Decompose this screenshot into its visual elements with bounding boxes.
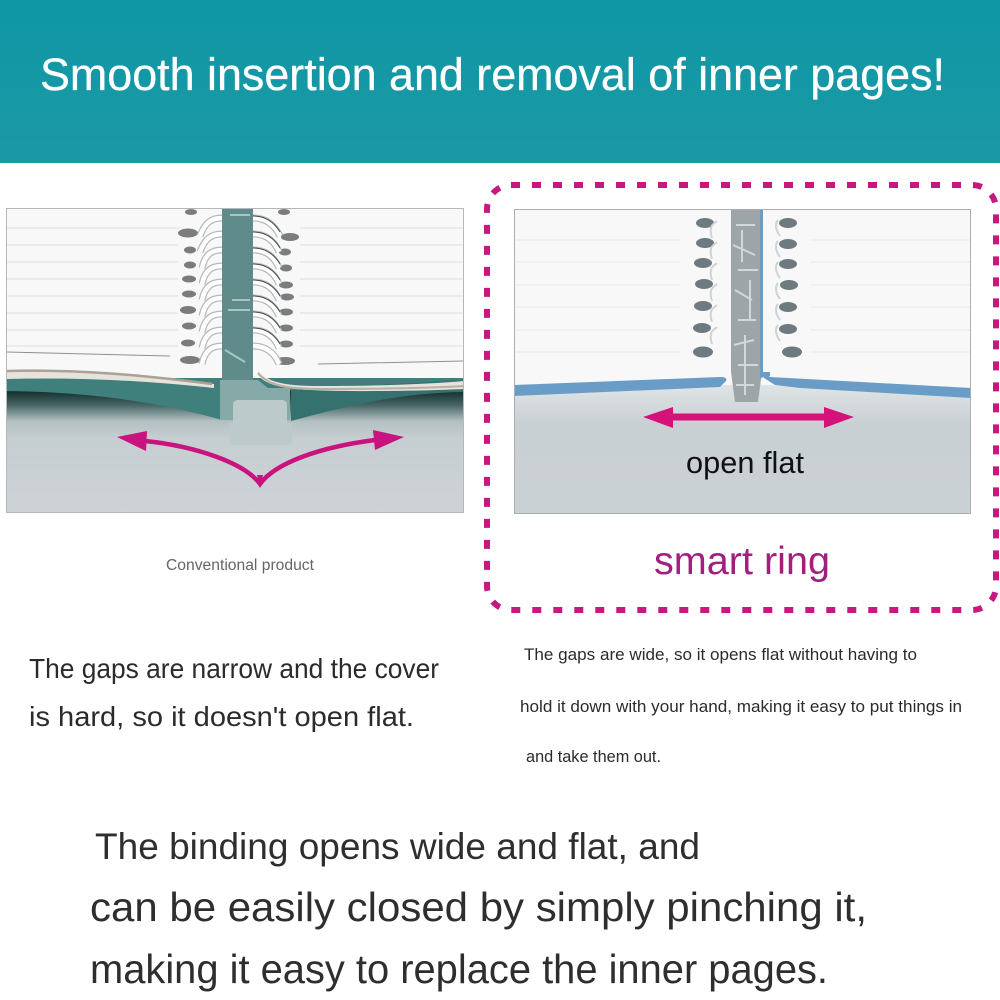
text: bottom summary: making it easy to replace the inner pages. bbox=[90, 946, 828, 992]
teal cover wedges bbox=[7, 378, 222, 420]
label: conventional product: Conventional product bbox=[166, 557, 315, 574]
text: conventional description: The gaps are narrow and the cover bbox=[29, 653, 439, 684]
page binding holes bbox=[178, 209, 299, 365]
open flat label: open flat bbox=[686, 445, 804, 480]
arrow: curved outward bbox=[117, 430, 404, 486]
header banner bbox=[0, 0, 1000, 163]
text: smart ring description bbox=[520, 645, 962, 766]
metallic spine bbox=[731, 209, 762, 402]
text: bottom summary: can be easily closed by simply pinching it, bbox=[90, 884, 867, 930]
spiral rings bbox=[200, 218, 280, 364]
photo: conventional notebook bbox=[6, 208, 464, 513]
open rings bbox=[711, 220, 780, 344]
transparent spine bbox=[222, 208, 253, 383]
clip tab bbox=[229, 400, 292, 445]
text: smart ring description: The gaps are wide, so it opens flat without having to bbox=[524, 645, 917, 664]
text: bottom summary: The binding opens wide and flat, and bbox=[95, 825, 700, 867]
arrow: flat double-headed bbox=[643, 407, 854, 428]
ruled lines bbox=[516, 240, 970, 352]
page edges bbox=[7, 370, 214, 388]
title: Smooth insertion and removal of inner pages! bbox=[40, 49, 945, 100]
text: bottom summary bbox=[90, 825, 867, 992]
text: smart ring description: hold it down with your hand, making it easy to put things in bbox=[520, 697, 962, 716]
text: conventional description: is hard, so it doesn't open flat. bbox=[29, 701, 414, 732]
text: smart ring description: and take them out. bbox=[526, 747, 661, 766]
ruled lines bbox=[7, 228, 464, 346]
text: conventional description bbox=[29, 653, 439, 732]
binding holes bbox=[693, 218, 802, 358]
photo: smart ring notebook bbox=[514, 209, 971, 514]
blue cover edges bbox=[514, 377, 726, 396]
dashed highlight frame bbox=[487, 185, 996, 610]
label: smart ring: smart ring bbox=[654, 540, 830, 583]
